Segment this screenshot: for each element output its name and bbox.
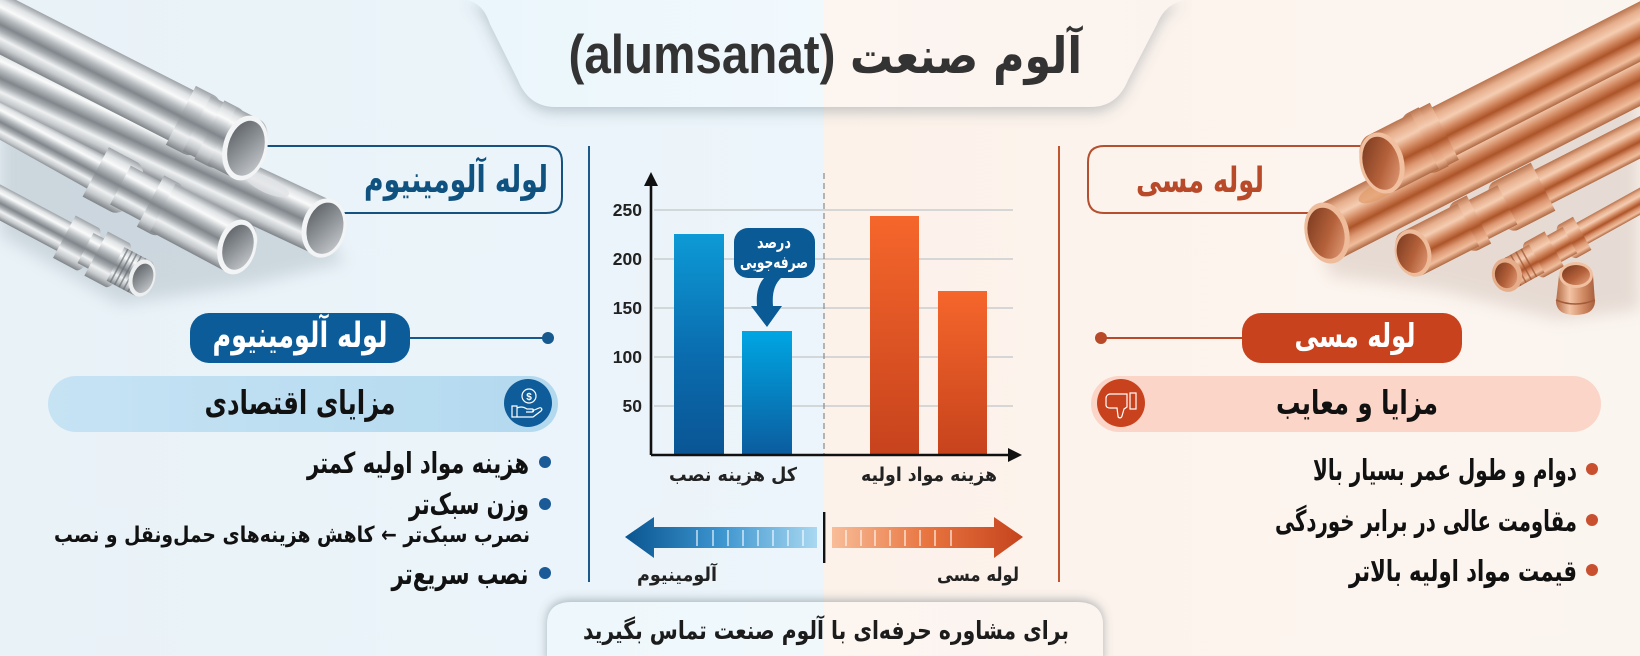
- background: copper side: [824, 0, 1640, 656]
- title persian: آلوم صنعت: [850, 25, 1084, 86]
- bar: copper second: [938, 291, 987, 455]
- image: aluminium pipes: [0, 0, 363, 308]
- bar: aluminium raw material: [742, 331, 792, 455]
- y axis arrowhead: [644, 172, 658, 186]
- panel: aluminium details: [48, 313, 558, 591]
- list: benefits: نصرب سبک‌تر ← کاهش هزینه‌های حمل‌ونقل و نصب: [54, 523, 530, 548]
- band: economic benefits: مزایای اقتصادی: [204, 383, 396, 423]
- list: benefits: هزینه مواد اولیه کمتر: [306, 446, 529, 480]
- list: benefits: [54, 446, 551, 591]
- y axis labels: 100: [613, 347, 642, 367]
- y axis labels: 50: [623, 396, 642, 416]
- y axis labels: 150: [613, 298, 642, 318]
- x axis label: raw material cost: هزینه مواد اولیه: [861, 464, 997, 486]
- bottom call to action panel: [547, 602, 1103, 656]
- list: benefits: وزن سبک‌تر: [408, 487, 529, 521]
- icon: hand with dollar coin: $: [526, 392, 532, 403]
- bar: copper raw material: [870, 216, 919, 455]
- list: pros and cons: [1275, 453, 1598, 588]
- divider left: [588, 146, 590, 582]
- aluminium pill: لوله آلومینیوم: [212, 313, 388, 356]
- scale label copper: لوله مسی: [937, 564, 1019, 586]
- copper pill: [1242, 313, 1462, 363]
- band: economic benefits: [48, 376, 558, 432]
- aluminium label text: لوله آلومینیوم: [364, 156, 548, 202]
- copper pill: لوله مسی: [1294, 316, 1416, 356]
- icon: hand with dollar coin: [504, 379, 552, 427]
- panel: copper details: [1091, 313, 1601, 588]
- bar: aluminium total install cost: [674, 234, 724, 455]
- callout: savings percent: [734, 228, 815, 278]
- y axis labels: [613, 200, 642, 416]
- title panel: [467, 0, 1184, 107]
- connector line and dot: [405, 337, 548, 339]
- arrow: copper scale: [832, 517, 1023, 558]
- icon: thumbs down: [1097, 379, 1145, 427]
- panel: aluminium label box: [262, 146, 562, 213]
- background: aluminium side: [0, 0, 824, 656]
- arrow: aluminium scale: [625, 517, 817, 558]
- copper label text: لوله مسی: [1136, 161, 1264, 201]
- axes: [651, 180, 1012, 455]
- connector line and dot: [1101, 337, 1246, 339]
- x axis label: total install cost: کل هزینه نصب: [669, 464, 798, 486]
- arrow: savings curve: [751, 277, 782, 327]
- band: pros and cons: مزایا و معایب: [1276, 383, 1438, 423]
- callout: savings percent: درصد: [757, 233, 791, 253]
- callout: savings percent: صرفه‌جویی: [740, 253, 808, 273]
- x axis arrowhead: [1008, 448, 1022, 462]
- divider right: [1058, 146, 1060, 582]
- scale label aluminium: آلومینیوم: [637, 562, 717, 586]
- y axis labels: 250: [613, 200, 642, 220]
- y axis labels: 200: [613, 249, 642, 269]
- panel: copper label box: [1088, 146, 1380, 213]
- bar chart: [613, 172, 1022, 486]
- list: benefits: نصب سریع‌تر: [390, 557, 528, 591]
- band: pros and cons: [1091, 376, 1601, 432]
- aluminium pill: [190, 313, 410, 363]
- center marker: [823, 512, 825, 563]
- bottom call to action panel: برای مشاوره حرفه‌ای با آلوم صنعت تماس بگیرید: [583, 615, 1069, 646]
- image: copper pipes: [1286, 0, 1640, 320]
- title latin: (alumsanat): [568, 23, 836, 85]
